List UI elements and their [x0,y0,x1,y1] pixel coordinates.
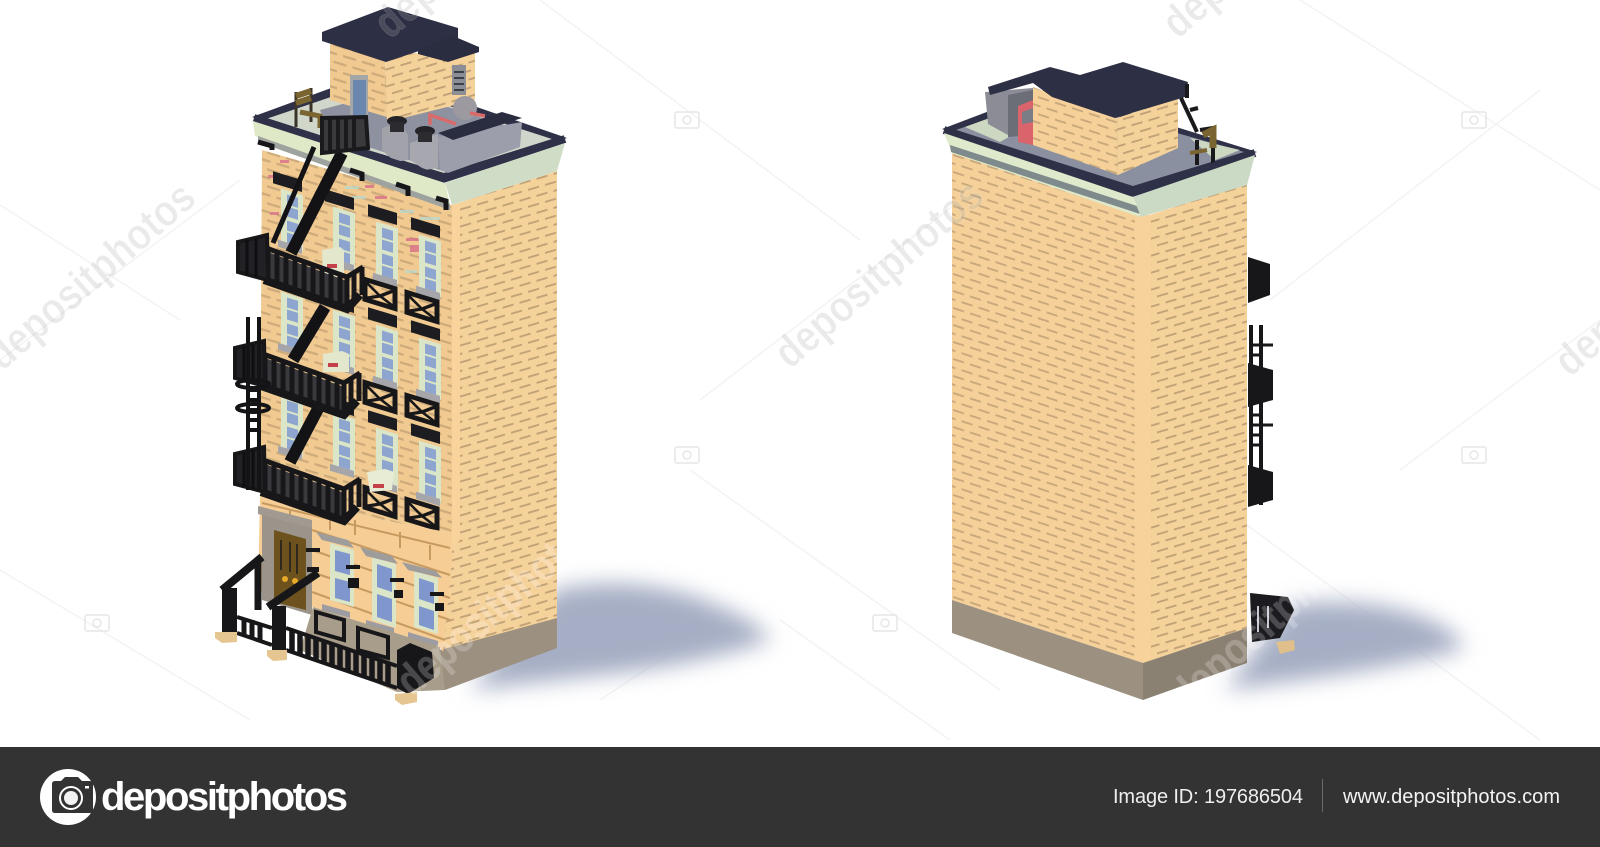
windows: upper floors [273,171,441,506]
right building: front wall [952,153,1143,663]
pipe and dome [430,96,485,125]
left building [215,7,567,705]
penthouse door [350,75,368,119]
AC units [322,247,394,492]
footer bar [0,747,1600,847]
chair [296,88,320,128]
left building: concrete base [432,618,557,690]
penthouse vent [452,65,466,95]
basement [300,607,445,692]
right building: penthouse walls [1033,87,1118,175]
penthouse walls [330,40,387,117]
right building: side wall [1143,184,1247,663]
footer divider [1322,779,1323,812]
image id: Image ID: 197686504 [1113,786,1303,808]
right building: penthouse roof [988,62,1188,118]
stoop railings and fence [222,557,434,694]
left building: right wall [443,171,557,652]
right building: concrete base [952,600,1247,700]
right building: roof slab [942,88,1257,195]
rooftop vents [382,116,438,170]
roof slab [252,72,567,183]
watermarks: depositphotos [1159,512,1388,720]
right building: rooftop shed [985,88,1033,145]
fire escape: roof landing [322,117,368,153]
left building: front wall [260,150,452,533]
cornice [253,121,565,210]
stone plinths [215,632,417,705]
fire escape: balconies [235,235,363,521]
watermarks: depositphotos [386,505,607,706]
ground floor windows [316,532,442,647]
right building: ladder and chair [1181,84,1213,165]
roof front edge [254,118,565,179]
fire escape: stairs [273,147,342,462]
right building [942,62,1295,700]
window guards [365,279,437,529]
shadow: right building [1225,602,1462,690]
icon: camera logo [40,769,96,825]
watermark camera icons [85,112,1486,631]
logo wordmark: depositphotos [101,775,348,819]
fire escape: ladder [237,317,269,490]
left building: corner highlight [452,203,460,550]
right building: roof front edge [944,130,1255,193]
right building: cornice [944,133,1255,217]
coloured bricks [268,160,420,252]
roof interior [266,82,552,173]
mechanical box [438,112,522,173]
right building: fire escape seen edge-on [1248,257,1273,507]
entry door [258,506,312,615]
rooftop [252,7,567,183]
shadow: left building [470,584,770,690]
right building: corner highlight [1135,215,1151,661]
penthouse roof [322,7,458,62]
website: www.depositphotos.com [1342,786,1560,808]
ground floor rusticated stone [258,497,452,652]
right building: fence seen edge-on [1250,593,1295,654]
wall lamps [306,548,444,611]
watermarks: depositphotos [764,170,993,378]
fire escape [235,117,368,521]
